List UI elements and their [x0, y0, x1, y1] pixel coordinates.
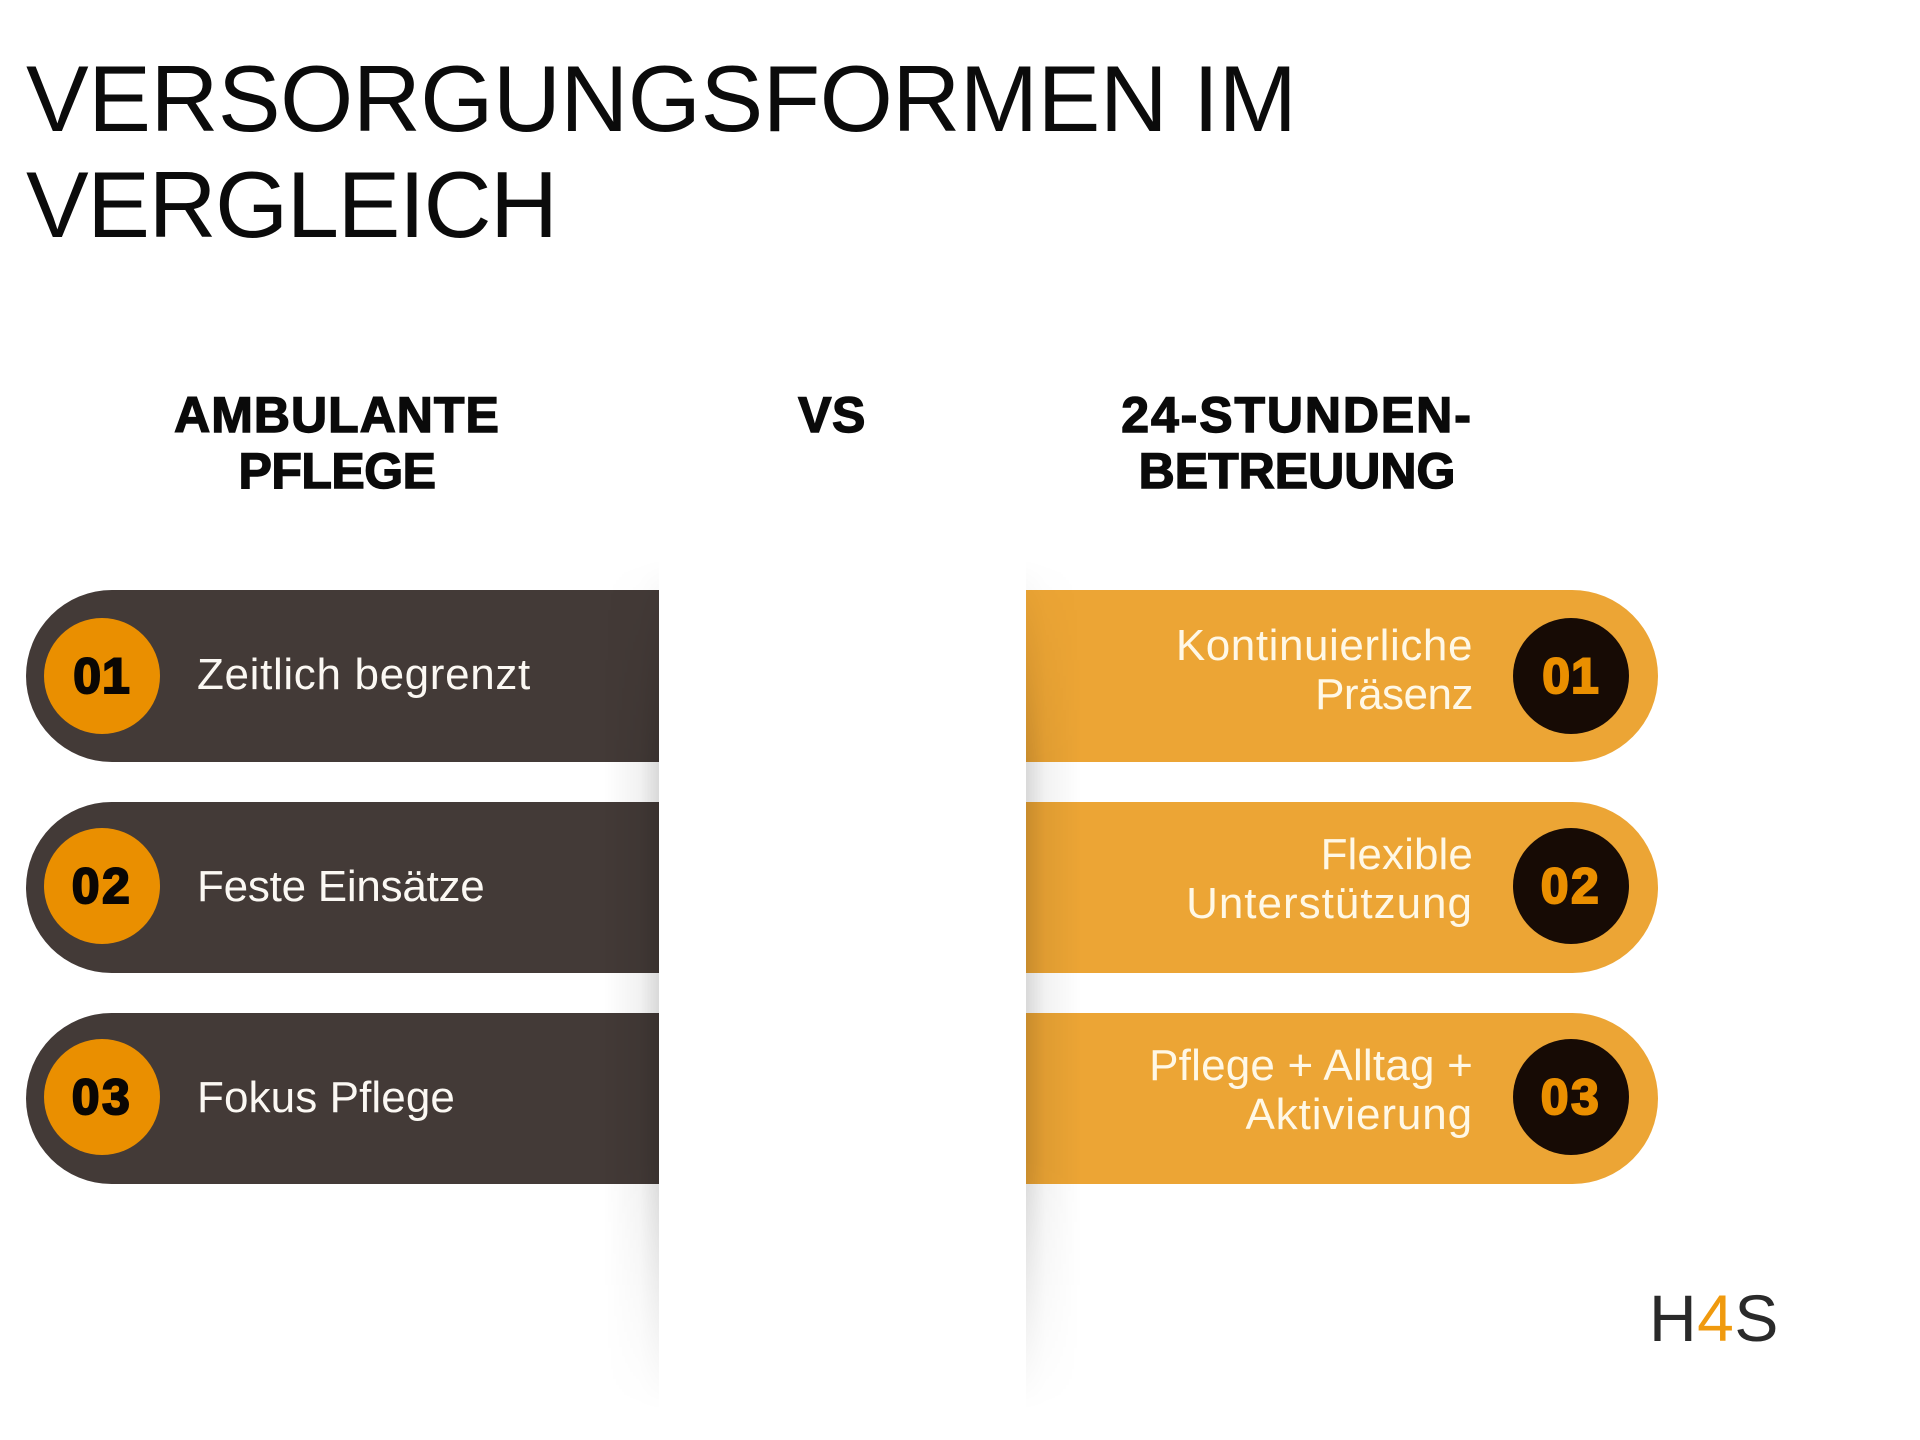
- badge 02: [44, 828, 160, 944]
- title: [26, 46, 1297, 257]
- panel: betreuung item 2: [1026, 802, 1658, 973]
- panel: ambulante item 3: [26, 1013, 659, 1184]
- label: Präsenz: [1315, 670, 1473, 719]
- badge 02: 02: [1541, 858, 1601, 914]
- label: Aktivierung: [1245, 1090, 1473, 1139]
- title: VERGLEICH: [26, 152, 557, 257]
- badge 01: 01: [73, 648, 131, 704]
- badge 02: [1513, 828, 1629, 944]
- badge 01: [44, 618, 160, 734]
- panel: ambulante item 1: [26, 590, 659, 762]
- panel: ambulante item 2: [26, 802, 659, 973]
- label: [1176, 621, 1473, 719]
- label: Fokus Pflege: [197, 1073, 455, 1122]
- panel: betreuung item 1: [1026, 590, 1658, 762]
- badge 03: [1513, 1039, 1629, 1155]
- label: [1186, 830, 1473, 928]
- label: [1149, 1041, 1473, 1139]
- label: Zeitlich begrenzt: [197, 650, 531, 699]
- heading: 24-stunden-betreuung: [1121, 387, 1473, 499]
- label: Pflege + Alltag +: [1149, 1041, 1473, 1090]
- heading: ambulante pflege: PFLEGE: [238, 443, 436, 499]
- heading: 24-stunden-betreuung: BETREUUNG: [1139, 443, 1455, 499]
- badge 01: 01: [1542, 648, 1600, 704]
- label: Flexible: [1321, 830, 1473, 879]
- label: Unterstützung: [1186, 879, 1473, 928]
- badge 03: 03: [1541, 1069, 1601, 1125]
- badge 03: 03: [72, 1069, 132, 1125]
- heading: ambulante pflege: [174, 387, 500, 499]
- heading: ambulante pflege: AMBULANTE: [174, 387, 500, 443]
- title: VERSORGUNGSFORMEN IM: [26, 46, 1297, 151]
- logo: H4S: H4S: [1649, 1281, 1779, 1355]
- heading: vs: VS: [798, 387, 866, 443]
- heading: 24-stunden-betreuung: 24-STUNDEN-: [1121, 387, 1473, 443]
- label: Kontinuierliche: [1176, 621, 1473, 670]
- badge 03: [44, 1039, 160, 1155]
- panel: betreuung item 3: [1026, 1013, 1658, 1184]
- badge 01: [1513, 618, 1629, 734]
- label: Feste Einsätze: [197, 862, 485, 911]
- badge 02: 02: [72, 858, 132, 914]
